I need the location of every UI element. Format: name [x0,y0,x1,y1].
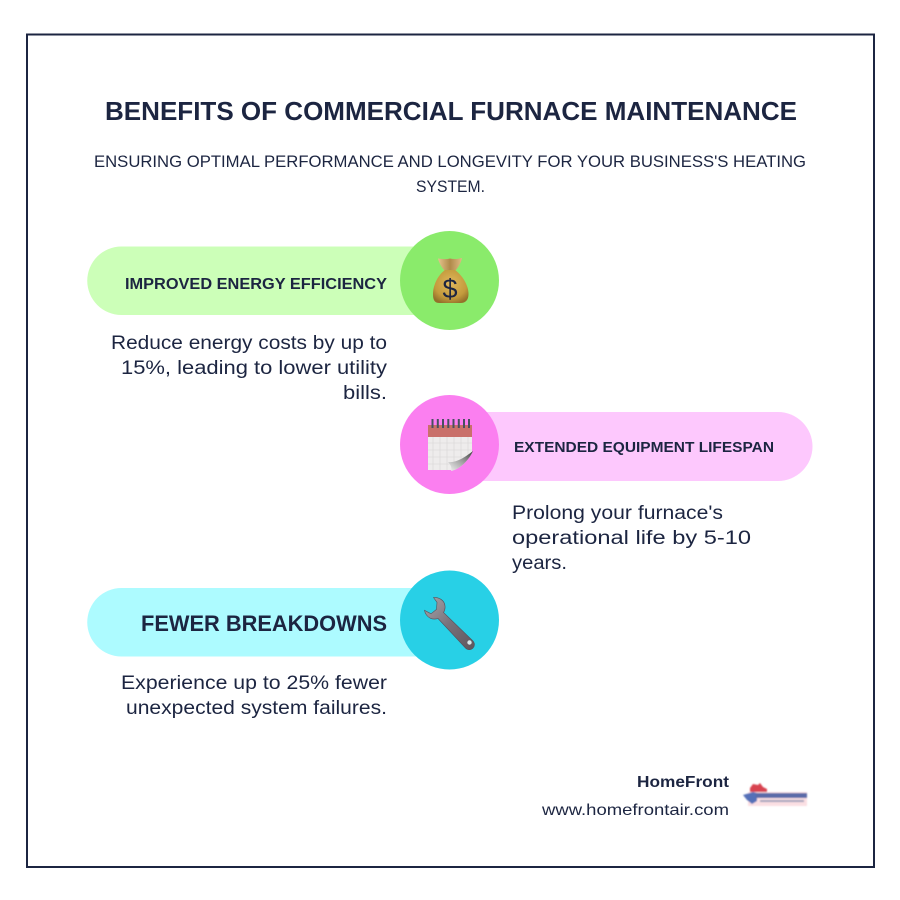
description: fewer breakdowns: Experience up to 25% fewer [121,673,388,694]
icon: money bag: $ [442,274,458,304]
subtitle: ENSURING OPTIMAL PERFORMANCE AND LONGEVITY FOR YOUR BUSINESS'S HEATING [94,153,806,171]
description: equipment lifespan: years. [512,553,567,574]
icon: wrench [400,570,499,670]
panel: fewer breakdowns [87,570,499,719]
panel: improved energy efficiency [87,231,499,404]
icon: money bag [400,231,499,330]
subtitle: SYSTEM. [416,178,485,196]
description: equipment lifespan: operational life by 5-10 [512,528,751,549]
heading: improved energy efficiency: IMPROVED ENERGY EFFICIENCY [125,276,387,293]
pill: extended equipment lifespan [460,412,813,481]
heading: extended equipment lifespan: EXTENDED EQUIPMENT LIFESPAN [514,440,774,456]
pill: improved energy efficiency [87,246,440,315]
panel: extended equipment lifespan [400,395,813,574]
pill: fewer breakdowns [87,588,440,656]
subtitle [94,153,806,196]
description: energy efficiency [111,333,388,404]
description: energy efficiency: 15%, leading to lower utility [121,358,388,379]
description: energy efficiency: Reduce energy costs by up to [111,333,387,354]
description: fewer breakdowns: unexpected system failures. [126,698,387,719]
heading: fewer breakdowns: FEWER BREAKDOWNS [141,611,387,636]
description: equipment lifespan: Prolong your furnace's [512,503,723,524]
website: www.homefrontair.com [541,802,729,819]
brand name: HomeFront [637,774,729,791]
description: fewer breakdowns [121,673,388,719]
icon: calendar [400,395,499,494]
description: equipment lifespan [512,503,751,574]
description: energy efficiency: bills. [343,383,387,404]
title: BENEFITS OF COMMERCIAL FURNACE MAINTENANCE [105,96,797,126]
footer: brand [541,774,807,819]
logo [743,783,807,806]
